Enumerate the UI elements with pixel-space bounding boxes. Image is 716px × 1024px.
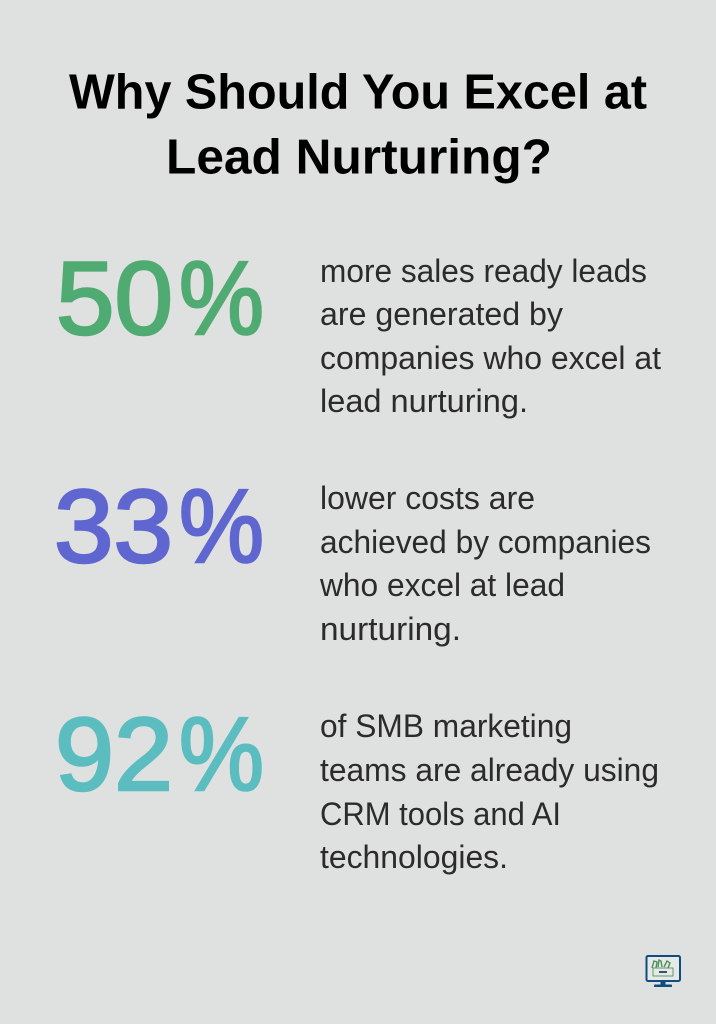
title <box>69 66 647 184</box>
text: 92% description: CRM tools and AI <box>320 796 561 832</box>
panel: 50% stat <box>56 241 661 419</box>
number: 92%: % <box>179 697 264 813</box>
text: 50% description: lead nurturing. <box>320 383 528 419</box>
panel: 92% stat <box>55 697 659 875</box>
text: 33% description <box>319 480 651 647</box>
number: 92%: 92 <box>55 697 173 813</box>
number: 50%: 50 <box>56 241 173 357</box>
number: 33% <box>54 469 264 585</box>
number: 50% <box>56 241 264 357</box>
text: 92% description: teams are already using <box>320 752 659 788</box>
icon: monitor with toolbox logo <box>646 956 680 987</box>
panel: 33% stat <box>54 469 651 647</box>
text: 50% description: companies who excel at <box>320 340 661 376</box>
number: 33%: 33 <box>54 469 173 585</box>
text: 33% description: nurturing. <box>320 611 461 647</box>
text: 33% description: achieved by companies <box>320 524 651 560</box>
text: 33% description: lower costs are <box>320 480 535 516</box>
text: 50% description <box>320 253 661 419</box>
number: 92% <box>55 697 264 813</box>
text: 92% description: of SMB marketing <box>320 708 572 744</box>
number: 33%: % <box>179 469 264 585</box>
title: Lead Nurturing? <box>166 130 552 184</box>
text: 92% description: technologies. <box>320 839 508 875</box>
text: 50% description: are generated by <box>320 296 563 332</box>
number: 50%: % <box>179 241 264 357</box>
text: 92% description <box>320 708 659 875</box>
title: Why Should You Excel at <box>69 66 647 120</box>
text: 33% description: who excel at lead <box>319 567 565 603</box>
text: 50% description: more sales ready leads <box>320 253 647 289</box>
